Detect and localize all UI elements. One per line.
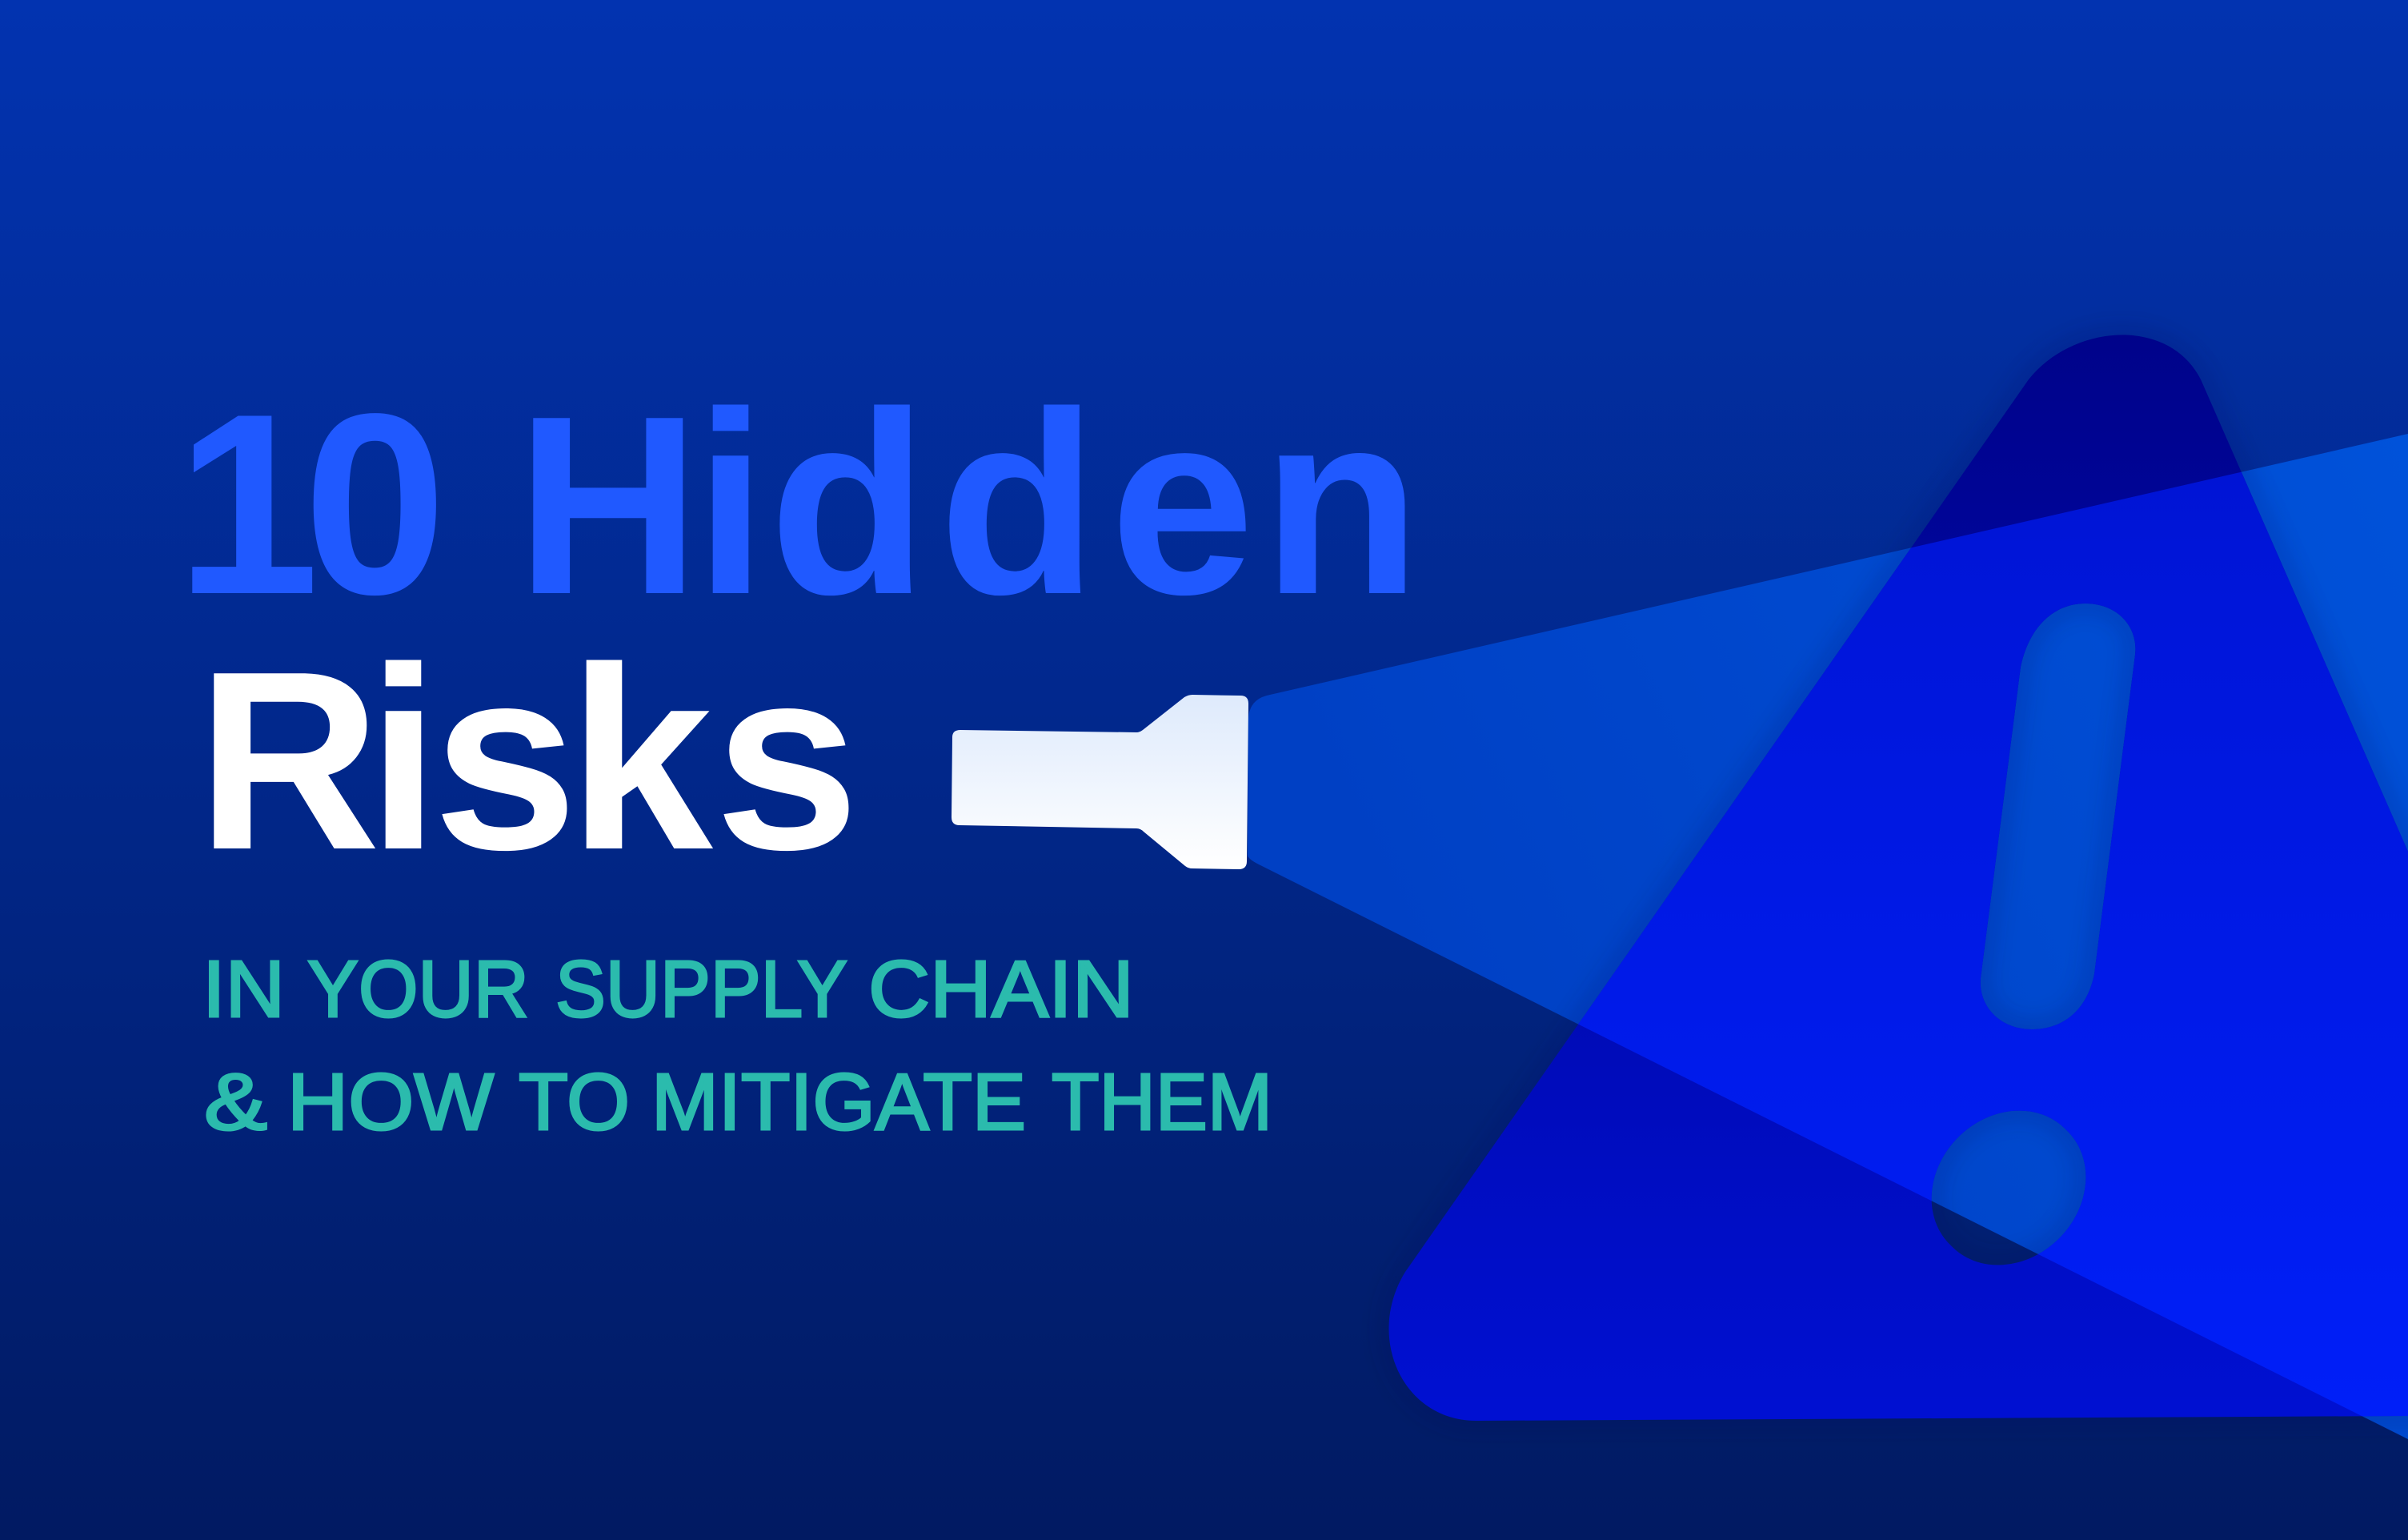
subtitle line two: & — [204, 1057, 267, 1147]
subtitle — [202, 944, 1272, 1147]
subtitle line one: CHAIN — [868, 944, 1134, 1034]
subtitle line two: THEM — [1052, 1057, 1272, 1147]
icon: flashlight — [952, 695, 1248, 869]
subtitle line two: HOW — [287, 1057, 495, 1147]
title line two: Risks — [197, 613, 859, 904]
light beam — [1248, 434, 2408, 1439]
title — [176, 358, 1421, 904]
triangle body outside the beam — [1389, 335, 2408, 1421]
subtitle line one: SUPPLY — [555, 944, 847, 1034]
title line one: 10 Hidden — [176, 358, 1421, 648]
triangle soft edge shadow — [1389, 335, 2408, 1421]
warning triangle with exclamation mark — [1389, 335, 2408, 1421]
subtitle line one: IN — [202, 944, 285, 1034]
triangle body lit by the beam — [1578, 472, 2408, 1417]
subtitle line two: TO — [519, 1057, 630, 1147]
subtitle line one — [202, 944, 1134, 1034]
subtitle line two: MITIGATE — [651, 1057, 1026, 1147]
subtitle line two — [204, 1057, 1272, 1147]
subtitle line one: YOUR — [307, 944, 529, 1034]
